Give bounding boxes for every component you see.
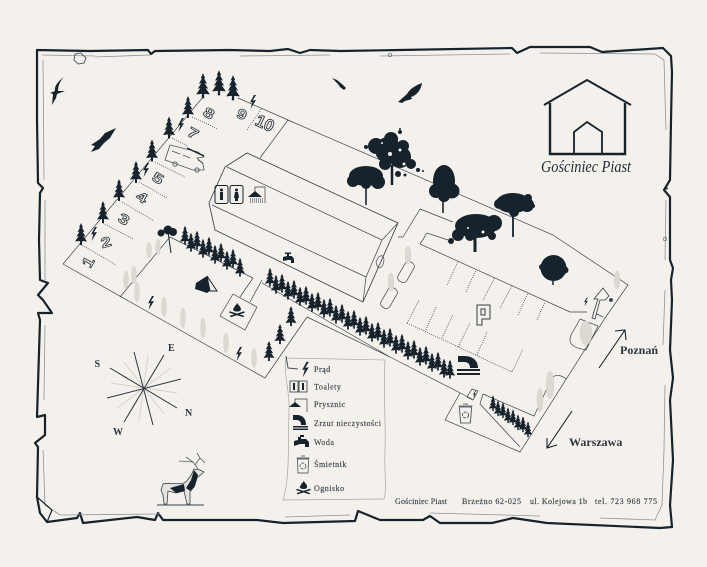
pitch numbers: 10 xyxy=(252,111,277,136)
label: Warszawa: Warszawa xyxy=(569,435,622,449)
tree: large speckled xyxy=(364,128,424,185)
main building xyxy=(209,153,398,302)
spruce row: central strip xyxy=(265,268,455,379)
arrow: to Warszawa xyxy=(547,411,572,448)
logo: house xyxy=(544,80,631,154)
legend: water: Woda xyxy=(314,438,334,447)
tree: oval xyxy=(429,165,460,213)
footer contact line: Brzeżno 62-025 xyxy=(462,497,521,506)
legend: shower: Prysznic xyxy=(314,400,346,409)
pitch numbers: 4 xyxy=(133,188,151,207)
parchment frame xyxy=(35,47,673,528)
compass rose: W xyxy=(113,427,123,438)
icon: water point tower xyxy=(592,288,612,319)
legend: power: Prąd xyxy=(314,365,331,374)
logo: name: Gościniec Piast xyxy=(541,157,631,176)
tree: small acacia xyxy=(158,226,177,253)
compass rose: N xyxy=(185,408,193,419)
legend: campfire: Ognisko xyxy=(314,484,345,493)
bird 1 xyxy=(50,77,65,105)
label: Poznań: Poznań xyxy=(620,343,658,357)
icon: parking xyxy=(477,305,490,325)
legend scroll xyxy=(283,356,385,500)
deciduous trees xyxy=(158,128,568,285)
icon: toilets xyxy=(215,186,243,204)
legend: toilets: Toalety xyxy=(314,382,341,392)
lightning icons xyxy=(91,95,588,398)
footer contact line: ul. Kolejowa 1b xyxy=(530,497,587,506)
legend: power xyxy=(302,362,331,377)
pitch numbers: 8 xyxy=(200,104,217,123)
compass rose xyxy=(94,343,193,438)
footer contact line xyxy=(395,497,657,506)
parking dotted bays xyxy=(82,108,545,372)
legend: wastewater: Zrzut nieczystości xyxy=(314,419,382,428)
tree: wide right xyxy=(494,193,535,237)
icon: motorhome xyxy=(165,145,204,172)
icon: wastewater drain xyxy=(457,356,480,375)
legend: toilets xyxy=(290,381,341,392)
icon: campfire xyxy=(230,303,244,316)
spruce trees around pitches xyxy=(75,70,296,361)
arrow: to Poznań xyxy=(599,330,626,368)
compass rose: E xyxy=(168,343,175,354)
deer illustration xyxy=(157,453,205,505)
legend: bin xyxy=(296,456,347,473)
pitch numbers: 1 xyxy=(79,254,98,271)
legend: campfire xyxy=(296,481,345,494)
bird 3 xyxy=(332,78,346,90)
tree: left of pair xyxy=(347,166,385,205)
compass rose: S xyxy=(94,359,100,370)
bird 4 xyxy=(398,83,422,103)
icon: tap xyxy=(283,252,294,263)
legend: bin: Śmietnik xyxy=(314,459,347,469)
pale trees xyxy=(124,239,620,412)
bird 2 xyxy=(91,128,116,152)
pitch numbers: 3 xyxy=(115,210,132,229)
legend: wastewater xyxy=(293,415,382,430)
icon: recycling bin xyxy=(458,404,472,423)
pitch numbers: 5 xyxy=(149,169,166,188)
legend: shower xyxy=(289,399,346,412)
footer contact line: Gościniec Piast xyxy=(395,497,448,506)
legend: water xyxy=(294,435,334,447)
pitch numbers: 7 xyxy=(184,124,201,143)
icon: tent xyxy=(195,276,217,293)
pitch numbers: 2 xyxy=(99,234,113,251)
tree: wide centre xyxy=(448,214,502,252)
icon: shower xyxy=(248,187,265,203)
tree: round xyxy=(539,255,568,285)
footer contact line: tel. 723 968 775 xyxy=(595,497,657,506)
spruce row: west strip xyxy=(180,226,245,277)
spruce row: south-east strip xyxy=(489,395,532,437)
pitch numbers xyxy=(79,104,277,271)
site plan outlines xyxy=(63,97,628,452)
pitch numbers: 9 xyxy=(234,106,249,124)
